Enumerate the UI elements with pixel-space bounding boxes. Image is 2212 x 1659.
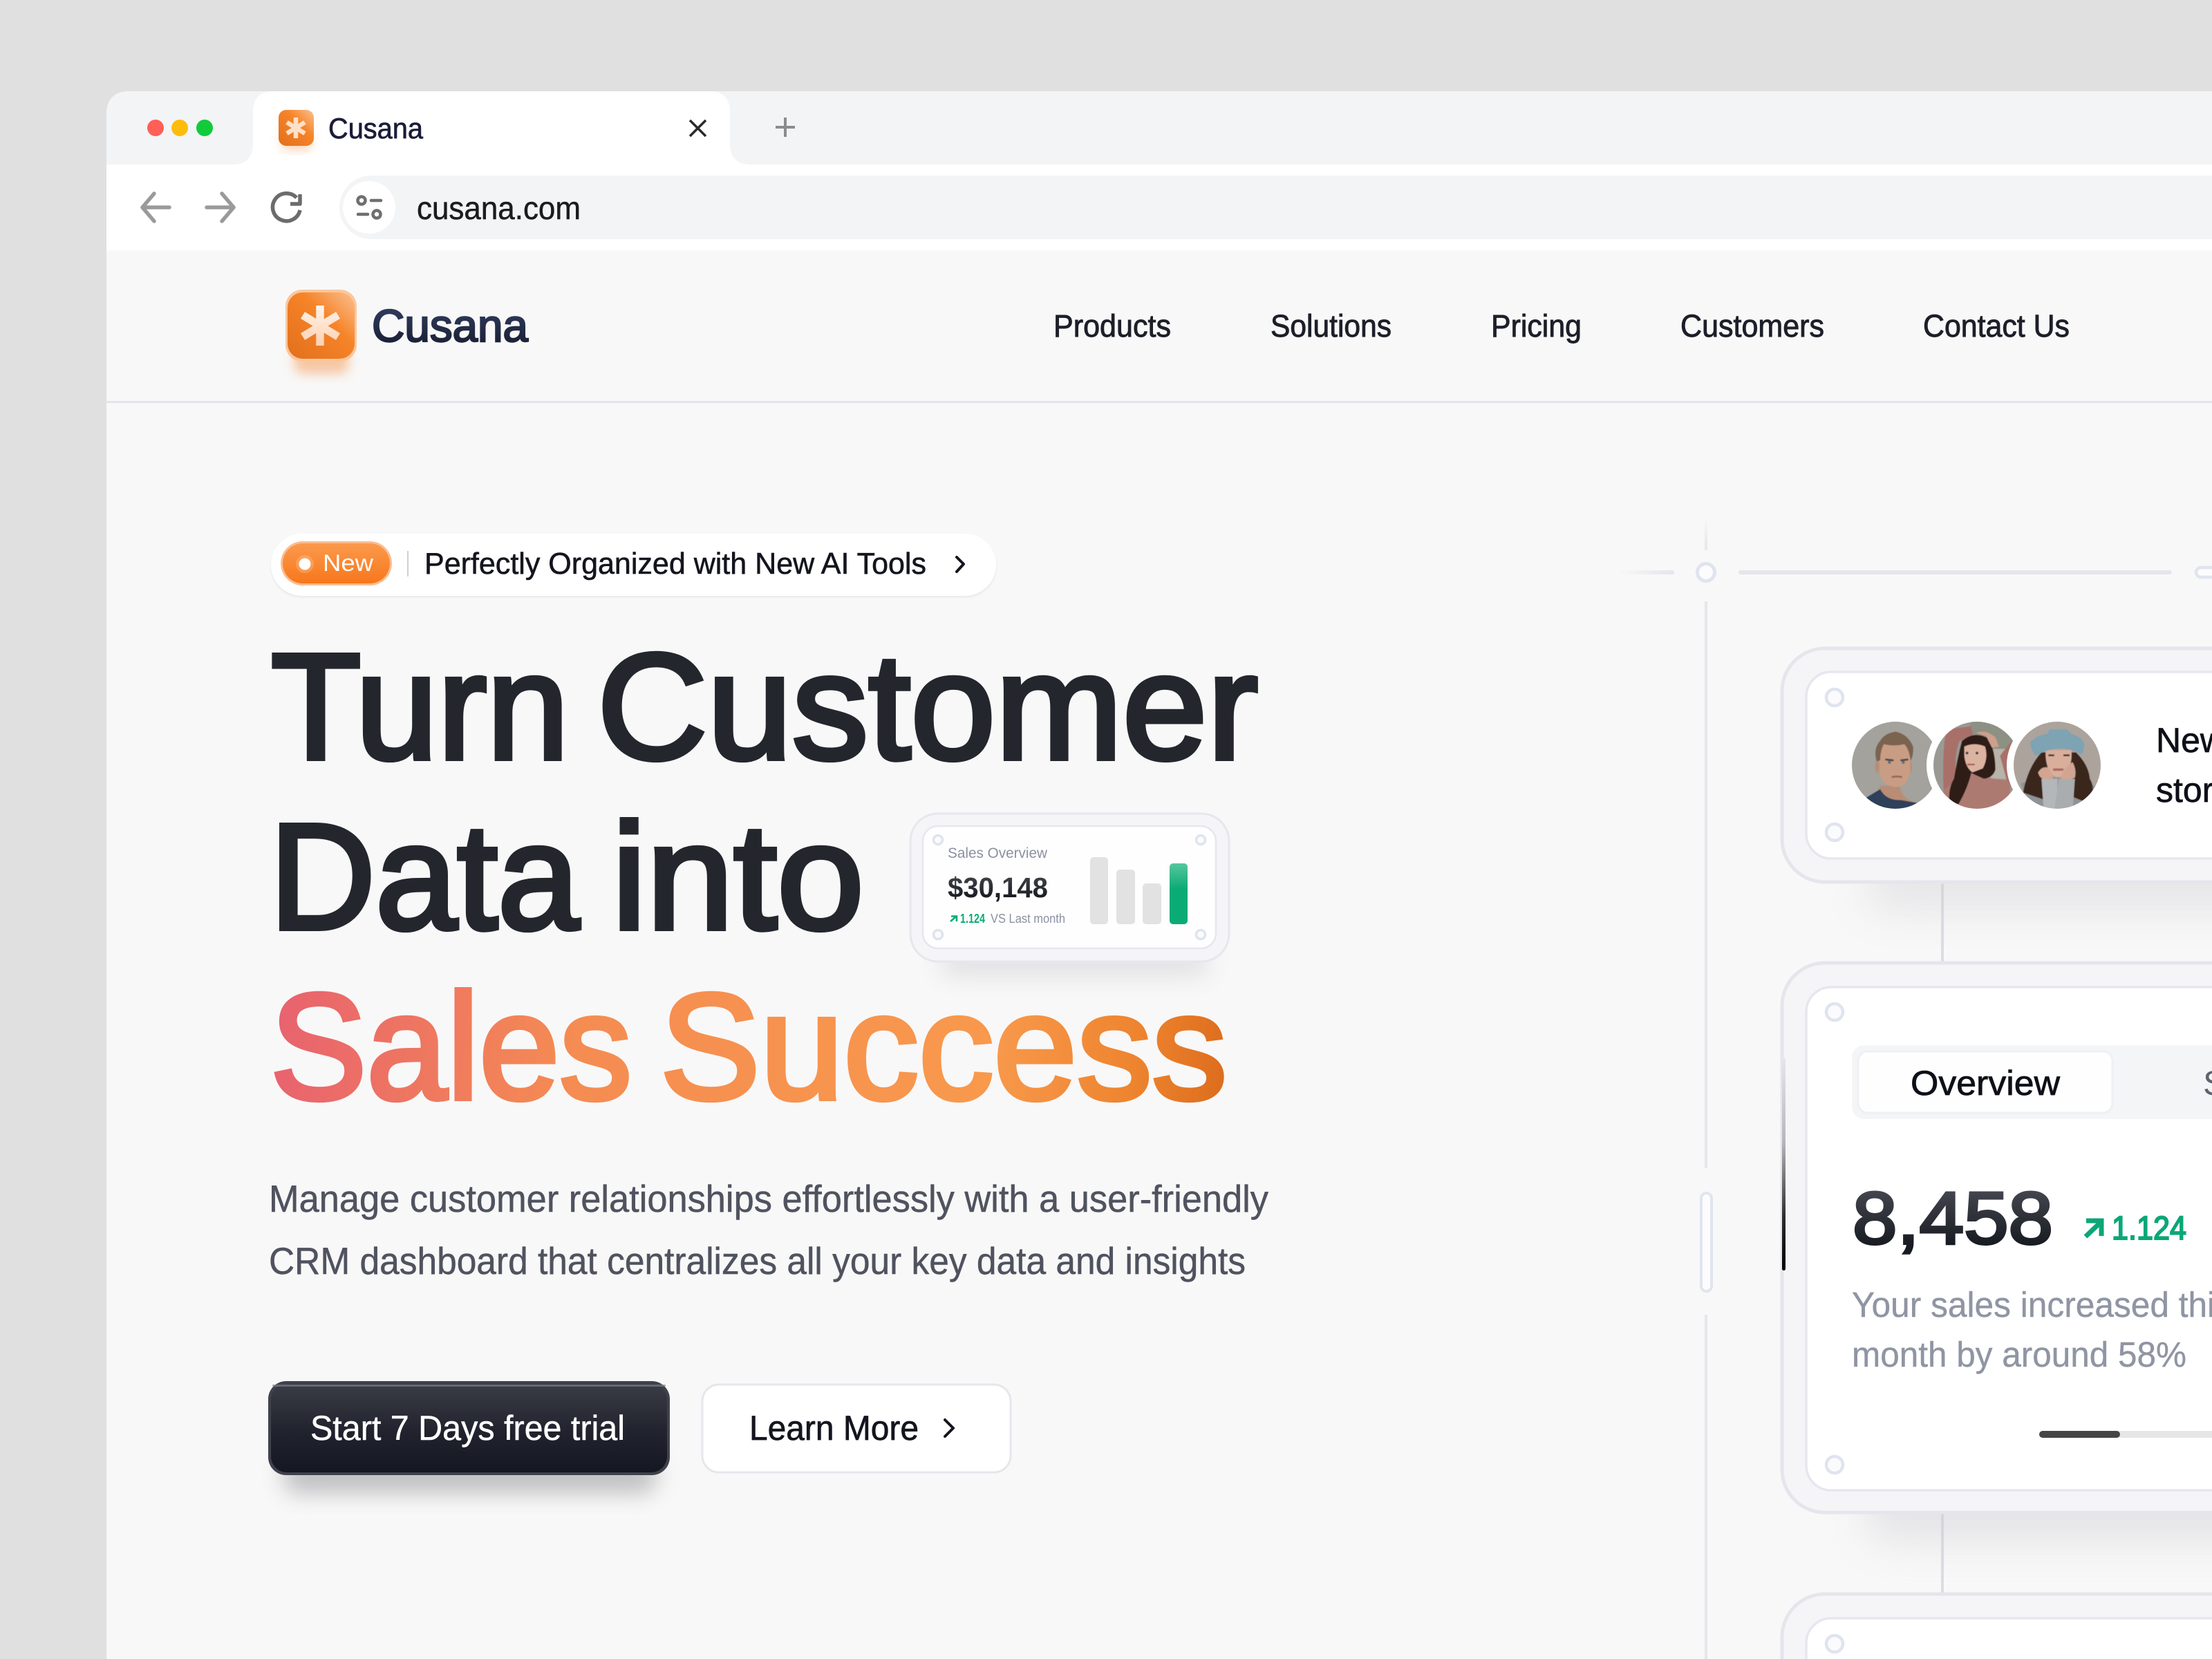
icon: chevron bbox=[945, 1420, 953, 1436]
avatar: man bbox=[1852, 722, 1933, 809]
avatar: woman in blue hat bbox=[2014, 722, 2101, 809]
secondary button: Learn More bbox=[749, 1409, 919, 1447]
new badge: New bbox=[323, 550, 373, 577]
tab title: Cusana bbox=[328, 112, 424, 144]
new badge bbox=[281, 541, 392, 585]
browser chrome bbox=[106, 91, 2212, 250]
icon: new tab plus bbox=[776, 118, 795, 137]
avatar ring bbox=[1927, 715, 2027, 816]
active tab bbox=[232, 91, 751, 165]
pill text: Perfectly Organized with New AI Tools bbox=[424, 547, 926, 581]
headline line 1: Customer bbox=[597, 624, 1258, 791]
mini sales card bbox=[910, 814, 1229, 977]
nav links bbox=[1053, 308, 2070, 344]
card screws bbox=[1826, 689, 1843, 841]
headline line 1: Turn bbox=[271, 624, 569, 791]
icon: forward arrow bbox=[207, 194, 234, 221]
card value: $30,148 bbox=[948, 872, 1048, 903]
tab bar bbox=[1852, 1045, 2212, 1119]
metric delta: 1.124 bbox=[2112, 1210, 2186, 1247]
icon: back arrow bbox=[142, 194, 169, 221]
avatar ring bbox=[2007, 715, 2108, 816]
metric delta bbox=[2086, 1210, 2186, 1247]
slider handle bbox=[1701, 1193, 1712, 1291]
nav links: Solutions bbox=[1271, 308, 1391, 344]
metric description bbox=[1852, 1285, 2212, 1374]
card screws bbox=[933, 835, 1206, 939]
icon: tab favicon bbox=[279, 110, 314, 149]
card delta bbox=[950, 912, 1065, 926]
secondary button bbox=[702, 1385, 1011, 1472]
icon: close tab bbox=[690, 120, 706, 136]
brand name: Cusana bbox=[372, 300, 528, 351]
icon: logo bbox=[285, 290, 357, 374]
progress indicator bbox=[2039, 1431, 2212, 1438]
tab bar: Overview bbox=[1911, 1064, 2061, 1103]
guide lines bbox=[1618, 517, 2212, 1659]
headline line 1 bbox=[271, 624, 1258, 791]
metric value: 8,458 bbox=[1853, 1177, 2053, 1259]
headline bbox=[270, 624, 1258, 1131]
headline line 2: Data bbox=[270, 794, 580, 961]
headline line 2 bbox=[270, 794, 864, 961]
bar chart bbox=[1090, 857, 1188, 924]
headline line 3: Success bbox=[660, 964, 1227, 1131]
headline line 3 bbox=[270, 964, 1227, 1131]
card screws bbox=[1826, 1004, 1843, 1473]
address bar bbox=[339, 176, 2212, 239]
accent line bbox=[1782, 1058, 1785, 1271]
metric description: month by around 58% bbox=[1852, 1335, 2186, 1374]
card delta: 1.124 bbox=[960, 912, 985, 926]
description: Manage customer relationships effortlessly with a user-friendly bbox=[269, 1177, 1268, 1220]
nav links: Contact Us bbox=[1923, 308, 2070, 344]
right handle bbox=[2196, 568, 2212, 577]
panel: customers card bbox=[1782, 648, 2212, 912]
card delta: VS Last month bbox=[991, 912, 1065, 926]
headline line 2: into bbox=[612, 794, 864, 961]
avatar: woman in pink sweater bbox=[1933, 722, 2013, 809]
panel: third card bbox=[1782, 1594, 2212, 1659]
top navigation bbox=[106, 290, 2212, 403]
nav links: Customers bbox=[1680, 308, 1824, 344]
icon: site settings bbox=[358, 196, 381, 218]
nav links: Pricing bbox=[1491, 308, 1582, 344]
connector lines bbox=[1941, 883, 1944, 1594]
headline line 3: Sales bbox=[270, 964, 632, 1131]
primary button: Start 7 Days free trial bbox=[310, 1409, 625, 1447]
avatars bbox=[1852, 722, 2101, 809]
window controls bbox=[147, 120, 213, 136]
nav links: Products bbox=[1053, 308, 1171, 344]
crosshair node bbox=[1698, 564, 1714, 581]
description: CRM dashboard that centralizes all your key data and insights bbox=[269, 1239, 1246, 1282]
card text bbox=[2156, 721, 2212, 809]
url text: cusana.com bbox=[417, 190, 581, 226]
description bbox=[269, 1177, 1268, 1282]
panel: overview card bbox=[1782, 963, 2212, 1541]
primary button bbox=[268, 1381, 670, 1493]
icon: chevron bbox=[957, 557, 964, 572]
announcement pill bbox=[271, 534, 996, 597]
card label: Sales Overview bbox=[948, 845, 1048, 861]
icon: reload bbox=[272, 194, 300, 221]
